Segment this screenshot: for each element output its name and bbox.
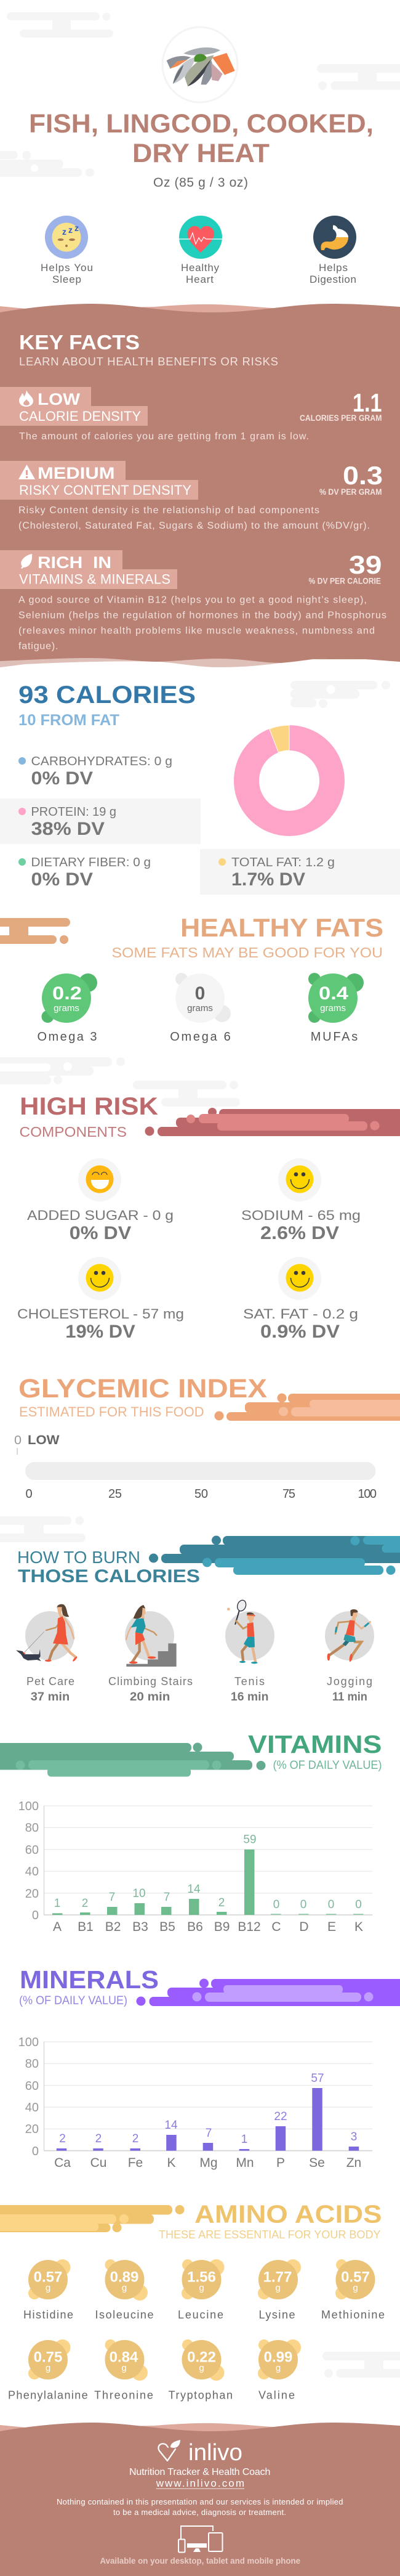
subheading: 10 FROM FAT [18, 712, 119, 729]
benefit: helps digestion [310, 216, 356, 285]
panel: healthy fats [0, 913, 383, 1044]
stat: valine: 0.99 [264, 2349, 292, 2365]
stat: phenylalanine: g [46, 2363, 50, 2373]
stat: omega 3 [37, 973, 97, 1044]
bar chart: vitamins: 7 [164, 1891, 170, 1904]
gauge scale: 0 [26, 1487, 33, 1501]
item: saturated fat: SAT. FAT - 0.2 g [243, 1306, 358, 1322]
item: cholesterol: 19% DV [65, 1322, 135, 1342]
fact: low calorie density [0, 387, 382, 442]
macro: total fat: TOTAL FAT: 1.2 g [231, 855, 335, 869]
stat: leucine [178, 2259, 224, 2321]
subheading: (% OF DAILY VALUE) [19, 1994, 127, 2007]
description: (releaves minor health problems like muscle weakness, numbness and [18, 626, 375, 636]
stat: histidine: g [46, 2283, 50, 2293]
title: FISH, LINGCOD, COOKED, [29, 109, 374, 139]
gauge scale: 100 [358, 1487, 377, 1501]
gauge marker [14, 1433, 60, 1455]
benefit: helps you sleep: z [74, 223, 79, 233]
bar chart: minerals: 20 [25, 2123, 39, 2136]
description: Risky Content density is the relationship of bad components [18, 505, 319, 516]
benefit: helps digestion: Helps [319, 262, 348, 274]
icon: flame [19, 390, 33, 407]
item: sodium [241, 1158, 361, 1243]
stat: isoleucine [95, 2259, 154, 2321]
bar chart: vitamins: B6 [187, 1920, 203, 1934]
heading: KEY FACTS [19, 331, 140, 354]
subheading: ESTIMATED FOR THIS FOOD [19, 1404, 204, 1420]
illustration: fish assortment [167, 47, 235, 86]
panel: minerals [18, 1965, 400, 2170]
bar chart: minerals: Ca [54, 2156, 71, 2170]
bar chart: minerals: 60 [25, 2079, 39, 2093]
bar chart: vitamins: B2 [105, 1920, 121, 1934]
subheading: COMPONENTS [20, 1124, 127, 1140]
bar chart: vitamins: 0 [355, 1898, 362, 1911]
bar chart: minerals: Mn [236, 2156, 254, 2170]
heading: VITAMINS [248, 1730, 382, 1758]
heading: MINERALS [20, 1965, 159, 1994]
fact: rich in vitamins and minerals: VITAMINS & MINERALS [19, 572, 170, 587]
benefit: helps you sleep: Sleep [52, 274, 81, 285]
benefit: healthy heart: Healthy [181, 262, 219, 274]
bar chart: minerals: K [167, 2156, 176, 2170]
bar chart: vitamins: 10 [132, 1887, 146, 1900]
macro: protein [0, 798, 201, 844]
stat: percent DV per calorie: % DV PER CALORIE [309, 577, 381, 585]
stat: valine: Valine [258, 2389, 295, 2402]
stat: lysine: Lysine [258, 2309, 295, 2321]
stat: methionine [321, 2259, 385, 2321]
bar chart: minerals: Mg [199, 2156, 218, 2170]
bar chart: vitamins: E [327, 1920, 336, 1934]
stat: omega 6: Omega 6 [170, 1030, 231, 1044]
heading: HOW TO BURN [17, 1548, 140, 1567]
bar chart: minerals: 100 [18, 2036, 39, 2049]
heading: 93 CALORIES [18, 681, 196, 709]
bar chart: vitamins: 80 [25, 1821, 39, 1835]
description: (Cholesterol, Saturated Fat, Sugars & Sodium) to the amount (%DV/gr). [18, 521, 370, 531]
activity: climbing stairs [125, 1605, 177, 1667]
bar chart: vitamins: 40 [25, 1865, 39, 1879]
stat: threonine: 0.84 [110, 2349, 138, 2365]
subheading: (% OF DAILY VALUE) [273, 1759, 382, 1772]
bar chart: vitamins [18, 1800, 372, 1934]
panel: how to burn those calories: THOSE CALORIES [18, 1566, 200, 1587]
bar chart: vitamins: B1 [78, 1920, 94, 1934]
stat: threonine: Threonine [94, 2389, 153, 2402]
benefit: helps you sleep: z [62, 227, 66, 237]
lower edge wave [0, 653, 400, 667]
stat: leucine: g [199, 2283, 204, 2293]
benefit: healthy heart [179, 216, 222, 285]
fact: low calorie density: LOW [38, 390, 81, 408]
fact: medium risky content density: MEDIUM [38, 464, 114, 482]
panel: vitamins [0, 1730, 382, 1934]
donut chart [246, 725, 332, 823]
fact: low calorie density: The amount of calories you are getting from 1 gram is low. [19, 431, 309, 442]
stat: percent DV per gram [319, 461, 383, 497]
stat: omega 6: 0 [195, 983, 205, 1004]
bar chart: vitamins: 100 [18, 1800, 39, 1813]
item: sodium: SODIUM - 65 mg [241, 1208, 361, 1223]
fact: rich in vitamins and minerals: RICH IN [38, 553, 111, 572]
bar chart: vitamins: 0 [32, 1909, 39, 1922]
stat: omega 6 [170, 973, 231, 1044]
stat: methionine: 0.57 [341, 2269, 370, 2285]
activity label: Climbing Stairs [108, 1675, 193, 1688]
bar chart: minerals: 7 [206, 2127, 212, 2140]
fact: rich in vitamins and minerals [0, 550, 386, 652]
stat: isoleucine: Isoleucine [95, 2309, 154, 2321]
bar chart: minerals: 2 [59, 2132, 66, 2145]
item: added sugar [27, 1158, 174, 1243]
activity label: 16 min [231, 1691, 268, 1704]
bar chart: vitamins: B9 [214, 1920, 230, 1934]
bar chart: minerals [18, 2036, 372, 2170]
disclaimer: to be a medical advice, diagnosis or treatment. [113, 2508, 286, 2517]
panel: how to burn those calories [16, 1535, 400, 1704]
activity: jogging [325, 1609, 374, 1662]
macro: dietary fiber: DIETARY FIBER: 0 g [31, 855, 151, 869]
bar chart: minerals: 40 [25, 2101, 39, 2115]
stat: lysine: g [275, 2283, 281, 2293]
stat: calories per gram [300, 388, 382, 423]
benefit: helps you sleep: z [68, 225, 73, 235]
stat: omega 6: grams [187, 1003, 213, 1014]
icon: leaf [21, 554, 32, 569]
bar chart: vitamins: B3 [132, 1920, 148, 1934]
heading: HEALTHY FATS [180, 913, 383, 942]
fact: medium risky content density [0, 461, 383, 531]
bar chart: minerals: 1 [241, 2133, 247, 2146]
panel: key facts [0, 304, 400, 667]
macro: dietary fiber [18, 855, 151, 890]
macro: carbohydrates [18, 754, 172, 789]
description: A good source of Vitamin B12 (helps you to get a good night’s sleep), [18, 595, 367, 605]
gauge marker: LOW [28, 1433, 60, 1447]
bar chart: vitamins: A [53, 1920, 62, 1934]
bar chart: vitamins: B12 [238, 1920, 261, 1934]
availability note: Available on your desktop, tablet and mobile phone [100, 2556, 300, 2566]
stat: tryptophan [169, 2339, 233, 2402]
bar chart: vitamins: 1 [54, 1897, 60, 1910]
gauge scale: 50 [194, 1487, 208, 1501]
footer [0, 2423, 400, 2576]
stat: leucine: 1.56 [187, 2269, 216, 2285]
stat: methionine: g [353, 2283, 358, 2293]
stat: phenylalanine: Phenylalanine [8, 2389, 88, 2402]
bar chart: vitamins: 59 [243, 1834, 257, 1847]
activity label [231, 1675, 268, 1704]
bar chart: vitamins: K [354, 1920, 363, 1934]
stat: omega 3: Omega 3 [37, 1030, 97, 1044]
bar chart: minerals: P [276, 2156, 285, 2170]
disclaimer: Nothing contained in this presentation and our services is intended or implied [57, 2497, 343, 2506]
bar chart: minerals: 0 [32, 2145, 39, 2158]
heading: AMINO ACIDS [194, 2200, 382, 2229]
description [18, 505, 370, 531]
panel: glycemic index [14, 1374, 400, 1501]
heading: GLYCEMIC INDEX [18, 1374, 267, 1404]
disclaimer [57, 2497, 343, 2517]
stat: omega 3: grams [54, 1003, 79, 1014]
stat: MUFAs [308, 973, 364, 1044]
activity label: Jogging [327, 1675, 372, 1688]
icon: devices [178, 2526, 223, 2552]
benefit: helps you sleep: Helps You [41, 262, 93, 274]
macro: protein: 38% DV [31, 819, 105, 839]
stat: isoleucine: g [122, 2283, 127, 2293]
panel: amino acids [0, 2200, 385, 2402]
activity label: 37 min [31, 1691, 70, 1704]
activity label [327, 1675, 372, 1704]
benefit: healthy heart: Heart [186, 274, 214, 285]
bar chart: vitamins: 0 [328, 1898, 334, 1911]
stat: MUFAs: 0.4 [319, 983, 348, 1004]
macro: total fat: 1.7% DV [231, 869, 305, 890]
macro: dietary fiber: 0% DV [31, 869, 93, 890]
bar chart: minerals: 3 [351, 2131, 357, 2143]
fact: low calorie density: CALORIE DENSITY [19, 408, 141, 424]
activity label: Tenis [234, 1675, 265, 1688]
stat: methionine: Methionine [321, 2309, 385, 2321]
macro: protein: PROTEIN: 19 g [31, 805, 116, 819]
panel: calories [0, 681, 400, 895]
website link: www.inlivo.com [156, 2477, 244, 2489]
serving size: Oz (85 g / 3 oz) [153, 176, 248, 190]
macro: carbohydrates: 0% DV [31, 768, 93, 789]
stat: histidine: 0.57 [34, 2269, 62, 2285]
item: cholesterol: CHOLESTEROL - 57 mg [17, 1306, 184, 1322]
subheading: THESE ARE ESSENTIAL FOR YOUR BODY [159, 2228, 380, 2241]
bar chart: minerals: 22 [274, 2110, 287, 2123]
stat: calories per gram: 1.1 [353, 388, 382, 417]
benefit: helps digestion: Digestion [310, 274, 356, 285]
item: added sugar: ADDED SUGAR - 0 g [27, 1208, 174, 1223]
stat: percent DV per calorie [309, 550, 382, 585]
bar chart: vitamins: 60 [25, 1843, 39, 1857]
item: added sugar: 0% DV [70, 1223, 131, 1243]
bar chart: vitamins: 20 [25, 1887, 39, 1901]
bar chart: vitamins: 14 [187, 1883, 201, 1896]
stat: MUFAs: MUFAs [311, 1030, 358, 1044]
item: saturated fat [243, 1257, 358, 1342]
stat: tryptophan: g [199, 2363, 204, 2373]
stat: valine [258, 2339, 301, 2402]
gauge scale: 75 [282, 1487, 295, 1501]
stat: calories per gram: CALORIES PER GRAM [300, 413, 382, 423]
bar chart: vitamins: B5 [159, 1920, 175, 1934]
logo: inlivo [188, 2440, 242, 2466]
bar chart: minerals: Se [309, 2156, 325, 2170]
bar chart: vitamins: 7 [109, 1891, 115, 1904]
activity: pet care [16, 1604, 78, 1662]
description: Selenium (helps the regulation of hormones in the body) and Phosphorus [18, 610, 386, 621]
bar chart: minerals: 2 [132, 2132, 138, 2145]
bar chart: minerals: 2 [95, 2132, 102, 2145]
panel: high risk components [17, 1093, 400, 1342]
item: saturated fat: 0.9% DV [260, 1322, 340, 1342]
subheading: SOME FATS MAY BE GOOD FOR YOU [112, 945, 383, 961]
stat: phenylalanine [8, 2339, 88, 2402]
stat: percent DV per calorie: 39 [349, 550, 382, 579]
icon: warning triangle [18, 465, 35, 479]
bar chart: vitamins: 0 [273, 1898, 279, 1911]
activity label: Pet Care [26, 1675, 74, 1688]
macro: carbohydrates: CARBOHYDRATES: 0 g [31, 754, 172, 768]
description: fatigue). [18, 641, 58, 652]
stat: isoleucine: 0.89 [110, 2269, 138, 2285]
description [18, 595, 386, 652]
bar chart: minerals: 57 [311, 2072, 324, 2085]
stat: histidine: Histidine [23, 2309, 73, 2321]
stat: percent DV per gram: % DV PER GRAM [319, 487, 382, 497]
activity label [108, 1675, 193, 1704]
bar chart: minerals: Fe [128, 2156, 143, 2170]
activity: tennis [225, 1599, 274, 1664]
item: sodium: 2.6% DV [260, 1223, 339, 1243]
bar chart: minerals: Cu [90, 2156, 106, 2170]
plate with food photo [162, 27, 238, 102]
stat: threonine: g [121, 2363, 127, 2373]
logo [158, 2440, 242, 2466]
bar chart: vitamins: C [271, 1920, 281, 1934]
stat: omega 3: 0.2 [52, 983, 82, 1004]
stat: leucine: Leucine [178, 2309, 223, 2321]
title: DRY HEAT [132, 139, 270, 168]
gauge bar [25, 1462, 375, 1480]
stat: phenylalanine: 0.75 [34, 2349, 62, 2365]
activity label: 11 min [332, 1691, 367, 1704]
bar chart: vitamins: D [299, 1920, 309, 1934]
stat: threonine [94, 2339, 153, 2402]
bar chart: vitamins: 2 [218, 1896, 225, 1909]
stat: lysine: 1.77 [263, 2269, 292, 2285]
bar chart: minerals: 14 [164, 2119, 178, 2132]
macro: total fat [200, 849, 400, 895]
bar chart: minerals: 80 [25, 2057, 39, 2071]
activity label [26, 1675, 74, 1704]
title [29, 109, 374, 168]
activity label: 20 min [130, 1691, 170, 1704]
stat: lysine [258, 2259, 301, 2321]
stat: valine: g [276, 2363, 281, 2373]
fact: medium risky content density: RISKY CONTENT DENSITY [19, 482, 191, 498]
tagline: Nutrition Tracker & Health Coach [129, 2467, 270, 2477]
stat: tryptophan: 0.22 [187, 2349, 216, 2365]
heading: HIGH RISK [20, 1093, 158, 1120]
item: cholesterol [17, 1257, 184, 1342]
subheading: LEARN ABOUT HEALTH BENEFITS OR RISKS [19, 355, 278, 368]
bar chart: vitamins: 0 [300, 1898, 306, 1911]
stat: percent DV per gram: 0.3 [343, 461, 383, 490]
stat: histidine [23, 2259, 73, 2321]
stat: tryptophan: Tryptophan [169, 2389, 233, 2402]
bar chart: minerals: Zn [346, 2156, 361, 2170]
stat: MUFAs: grams [320, 1003, 346, 1014]
benefit: helps you sleep [41, 216, 93, 285]
gauge marker: 0 [14, 1434, 22, 1447]
bar chart: vitamins: 2 [82, 1897, 88, 1910]
gauge scale: 25 [108, 1487, 122, 1501]
gauge scale [26, 1487, 377, 1501]
